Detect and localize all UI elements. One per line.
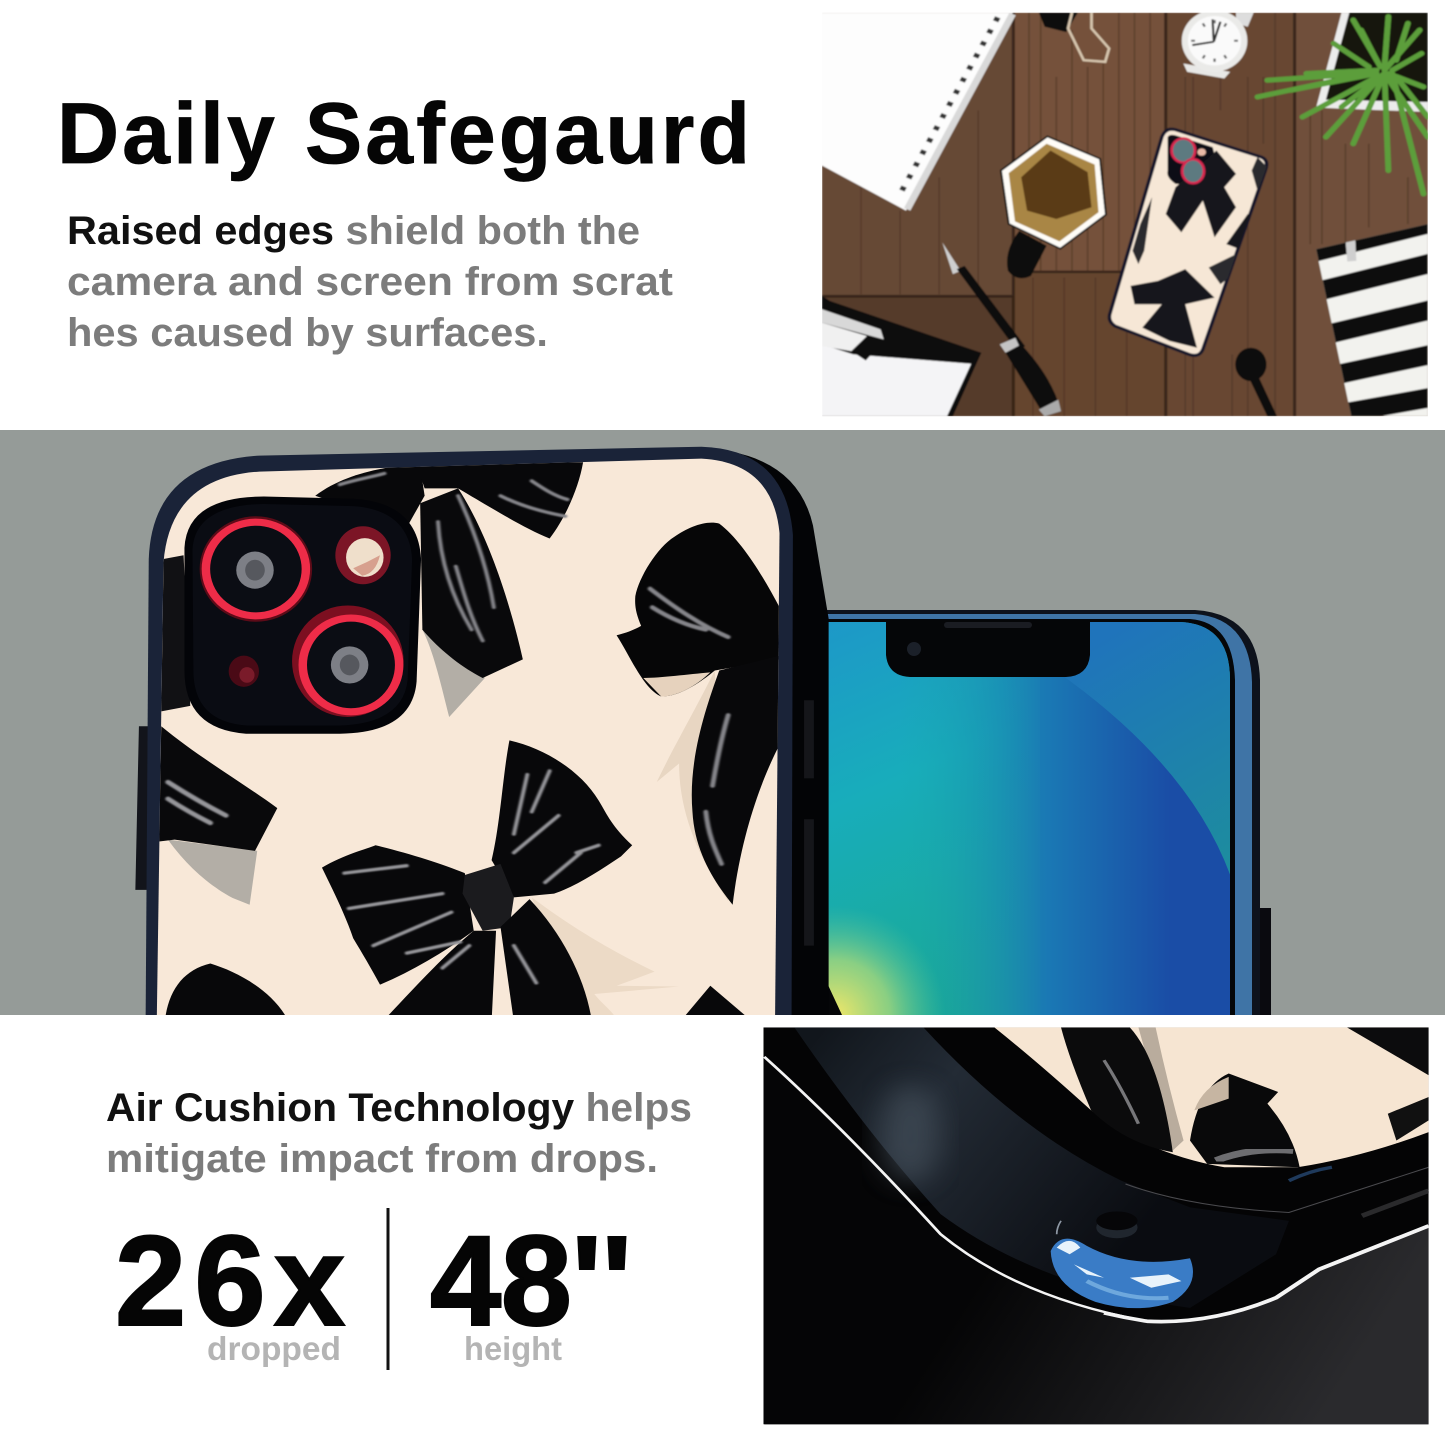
photo: air cushion corner close-up — [763, 1027, 1429, 1424]
phone case back with bows — [135, 447, 829, 1022]
icon: alarm clock — [1182, 10, 1254, 79]
icon: spiral notebook — [822, 13, 1013, 211]
mini phone with bow case — [1109, 129, 1267, 355]
icon: camera module — [184, 497, 421, 734]
text block: air cushion: mitigate impact from drops. — [106, 1137, 658, 1181]
icon: pen — [942, 242, 1061, 416]
icon: striped notebook — [1316, 224, 1428, 416]
panel: gray band with phones — [0, 430, 1445, 1022]
bow: right — [617, 523, 780, 905]
bow: top left edge — [161, 555, 190, 711]
text block: air cushion — [106, 1086, 692, 1181]
bow: center — [322, 740, 679, 1022]
stat: 26x dropped: 26x — [115, 1210, 345, 1353]
icon: microphone — [229, 656, 259, 687]
white edge highlight — [764, 1057, 1429, 1322]
icon: clipboard — [822, 296, 981, 416]
text block: air cushion: Air Cushion Technology helps — [106, 1086, 692, 1130]
bow: bottom right — [686, 986, 745, 1015]
icon: lens top — [200, 516, 312, 622]
bow: left middle — [159, 726, 277, 905]
text block: raised edges: Raised edges shield both the — [67, 209, 640, 253]
case edge details — [1126, 1167, 1429, 1216]
text block: raised edges: hes caused by surfaces. — [67, 311, 548, 355]
stat: 26x dropped: dropped — [207, 1330, 341, 1367]
text block: raised edges: camera and screen from scrat — [67, 260, 673, 304]
icon: screen notch — [886, 619, 1090, 677]
text block: raised edges — [67, 209, 673, 355]
bow fragments on case — [1061, 1027, 1429, 1167]
title: Daily Safegaurd — [57, 86, 750, 182]
icon: flash — [335, 526, 391, 584]
icon: potted plant — [1258, 13, 1428, 194]
stat: 48 inch height: 48'' — [430, 1210, 632, 1353]
icon: coffee cup — [1001, 136, 1106, 278]
bow: top — [315, 462, 583, 717]
icon: binder clip — [1039, 13, 1109, 62]
cream case surface — [994, 1027, 1429, 1167]
icon: blue air cushion droplet — [1051, 1211, 1193, 1308]
photo: desk flat lay with phone case — [822, 10, 1445, 420]
icon: lens bottom — [292, 605, 404, 717]
stat: 48 inch height: height — [464, 1330, 562, 1367]
bow: bottom left — [166, 964, 285, 1015]
phone front with blue frame and gradient screen — [815, 610, 1271, 1015]
icon: earbud — [1235, 348, 1277, 416]
